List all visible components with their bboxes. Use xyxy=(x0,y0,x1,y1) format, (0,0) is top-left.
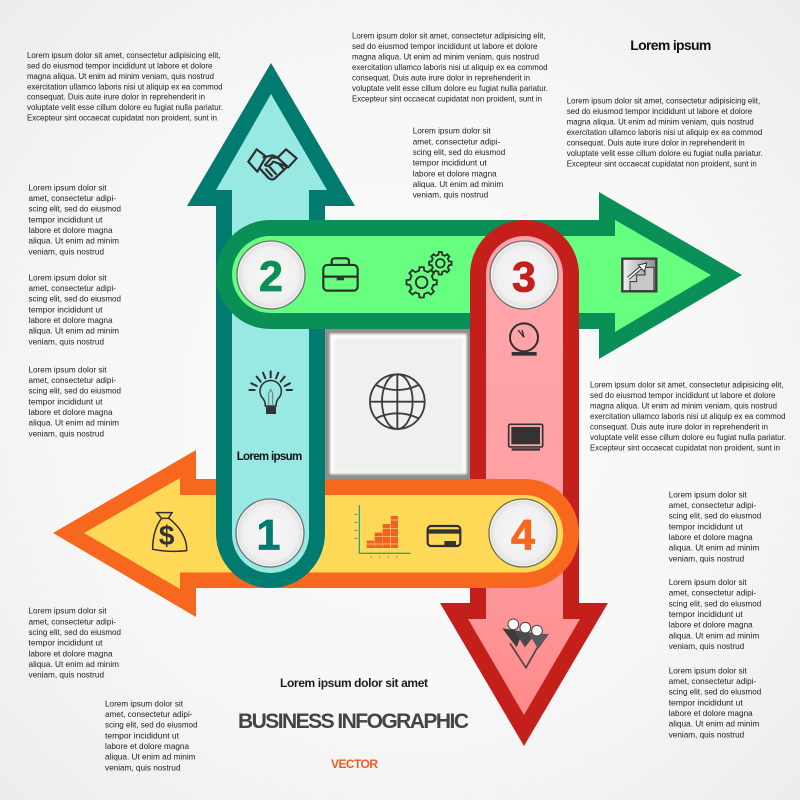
text block: right narrow 2: scing elit, sed do eiusmod xyxy=(669,598,761,608)
text block: top left: consequat. Duis aute irure dolor in reprehenderit in xyxy=(27,92,205,102)
text block: upper center narrow: tempor incididunt ut xyxy=(413,158,487,168)
text block: top center: magna aliqua. Ut enim ad minim veniam, quis nostrud xyxy=(352,52,539,62)
text block: right narrow 3: labore et dolore magna xyxy=(669,708,753,718)
text block: left narrow 2: scing elit, sed do eiusmod xyxy=(28,294,121,304)
text block: left narrow 1: amet, consectetur adipi- xyxy=(28,193,116,203)
number badge 4 xyxy=(489,499,557,567)
text block: top center: Excepteur sint occaecat cupidatat non proident, sunt in xyxy=(352,93,542,103)
text block: top left: sed do eiusmod tempor incididunt ut labore et dolore xyxy=(27,60,213,70)
text block: bottom left narrow xyxy=(105,698,198,772)
text block: left narrow 1: veniam, quis nostrud xyxy=(28,246,104,256)
text block: upper center narrow xyxy=(413,126,505,200)
text block: top right xyxy=(567,96,763,168)
text block: left narrow 3: amet, consectetur adipi- xyxy=(28,375,116,385)
text block: right narrow 2: aliqua. Ut enim ad minim xyxy=(669,630,759,640)
panel: arrow 4 orange left arrow xyxy=(53,450,579,617)
text block: right narrow 1: aliqua. Ut enim ad minim xyxy=(669,543,759,553)
text block: left narrow 1: labore et dolore magna xyxy=(28,225,113,235)
number badge 3 xyxy=(490,241,558,309)
heading: top right: Lorem ipsum xyxy=(630,37,711,53)
text block: top right: Lorem ipsum dolor sit amet, consectetur adipisicing elit, xyxy=(567,96,760,106)
text block: top left xyxy=(27,50,223,123)
text block: right narrow 2: labore et dolore magna xyxy=(669,620,753,630)
text block: right narrow 3: tempor incididunt ut xyxy=(669,697,743,707)
text block: top center: voluptate velit esse cillum dolore eu fugiat nulla pariatur. xyxy=(352,83,548,93)
text block: upper center narrow: Lorem ipsum dolor sit xyxy=(413,126,491,136)
text block: lower left narrow: tempor incididunt ut xyxy=(28,638,103,648)
text block: right narrow 1: veniam, quis nostrud xyxy=(669,553,744,563)
number badge 1: 1 xyxy=(257,512,280,560)
text block: right narrow 1: labore et dolore magna xyxy=(669,532,753,542)
text block: bottom left narrow: Lorem ipsum dolor sit xyxy=(105,698,184,708)
text block: right narrow 3: aliqua. Ut enim ad minim xyxy=(669,719,759,729)
text block: middle right xyxy=(590,380,786,452)
icon: globe xyxy=(370,374,425,429)
text block: top right: exercitation ullamco laboris nisi ut aliquip ex ea commod xyxy=(567,127,762,137)
text block: lower left narrow: amet, consectetur adipi- xyxy=(28,616,116,626)
text block: left narrow 2: Lorem ipsum dolor sit xyxy=(28,272,107,282)
text block: middle right: magna aliqua. Ut enim ad minim veniam, quis nostrud xyxy=(590,401,777,411)
text block: middle right: Lorem ipsum dolor sit amet, consectetur adipisicing elit, xyxy=(590,380,784,390)
text block: top left: Excepteur sint occaecat cupidatat non proident, sunt in xyxy=(27,113,217,123)
text block: middle right: consequat. Duis aute irure dolor in reprehenderit in xyxy=(590,421,768,431)
text block: top center: Lorem ipsum dolor sit amet, consectetur adipisicing elit, xyxy=(352,31,546,41)
text block: top right: magna aliqua. Ut enim ad minim veniam, quis nostrud xyxy=(567,117,754,127)
subtitle: Lorem ipsum dolor sit amet xyxy=(280,676,428,690)
text block: right narrow 3: veniam, quis nostrud xyxy=(669,729,744,739)
text block: bottom left narrow: scing elit, sed do eiusmod xyxy=(105,720,198,730)
panel: arrow 1 lower stem overlapping orange arrow xyxy=(216,430,325,588)
text block: middle right: Excepteur sint occaecat cupidatat non proident, sunt in xyxy=(590,442,780,452)
number badge 2 xyxy=(237,241,305,309)
number badge 2: 2 xyxy=(259,253,283,301)
text block: right narrow 1: tempor incididunt ut xyxy=(669,521,743,531)
panel: arrow 1 teal up arrow xyxy=(187,63,355,588)
text block: left narrow 3: scing elit, sed do eiusmod xyxy=(28,386,121,396)
text block: lower left narrow xyxy=(28,606,121,680)
panel: arrow 2 green right arrow xyxy=(216,192,742,359)
text block: right narrow 2: Lorem ipsum dolor sit xyxy=(669,577,747,587)
text block: bottom left narrow: amet, consectetur adipi- xyxy=(105,709,193,719)
text block: right narrow 1: Lorem ipsum dolor sit xyxy=(669,489,747,499)
text block: right narrow 3: scing elit, sed do eiusmod xyxy=(669,687,761,697)
text block: top right: sed do eiusmod tempor incididunt ut labore et dolore xyxy=(567,106,752,116)
icon: handshake xyxy=(248,149,297,179)
text block: top left: voluptate velit esse cillum dolore eu fugiat nulla pariatur. xyxy=(27,102,223,112)
text block: top left: magna aliqua. Ut enim ad minim veniam, quis nostrud xyxy=(27,71,214,81)
text block: top center: consequat. Duis aute irure dolor in reprehenderit in xyxy=(352,72,530,82)
tagline: VECTOR xyxy=(331,757,378,771)
icon: monitor xyxy=(509,424,543,451)
text block: upper center narrow: scing elit, sed do eiusmod xyxy=(413,147,505,157)
text block: left narrow 3 xyxy=(28,364,121,438)
icon: light bulb xyxy=(249,371,292,414)
text block: left narrow 2: tempor incididunt ut xyxy=(28,304,103,314)
bar chart xyxy=(355,505,411,558)
text block: left narrow 3: aliqua. Ut enim ad minim xyxy=(28,418,119,428)
text block: bottom left narrow: veniam, quis nostrud xyxy=(105,762,181,772)
text block: left narrow 2: amet, consectetur adipi- xyxy=(28,283,116,293)
text block: left narrow 2: veniam, quis nostrud xyxy=(28,336,104,346)
text block: right narrow 2 xyxy=(669,577,761,651)
text block: top left: Lorem ipsum dolor sit amet, consectetur adipisicing elit, xyxy=(27,50,220,60)
text block: bottom left narrow: labore et dolore magna xyxy=(105,741,189,751)
text block: middle right: sed do eiusmod tempor incididunt ut labore et dolore xyxy=(590,390,776,400)
text block: left narrow 2 xyxy=(28,272,121,346)
text block: upper center narrow: veniam, quis nostrud xyxy=(413,190,488,200)
text block: upper center narrow: aliqua. Ut enim ad minim xyxy=(413,179,503,189)
text block: right narrow 2: amet, consectetur adipi- xyxy=(669,588,756,598)
text block: right narrow 2: tempor incididunt ut xyxy=(669,609,743,619)
text block: lower left narrow: veniam, quis nostrud xyxy=(28,670,104,680)
text block: top left: exercitation ullamco laboris nisi ut aliquip ex ea commod xyxy=(27,81,223,91)
text block: left narrow 2: aliqua. Ut enim ad minim xyxy=(28,326,119,336)
text block: top right: Excepteur sint occaecat cupidatat non proident, sunt in xyxy=(567,158,757,168)
number badge 1 xyxy=(236,499,304,567)
text block: top center: exercitation ullamco laboris nisi ut aliquip ex ea commod xyxy=(352,62,548,72)
text block: left narrow 1: scing elit, sed do eiusmod xyxy=(28,204,121,214)
text block: right narrow 2: veniam, quis nostrud xyxy=(669,641,744,651)
text block: top center xyxy=(352,31,548,103)
text block: right narrow 1: amet, consectetur adipi- xyxy=(669,500,756,510)
text block: left narrow 1: aliqua. Ut enim ad minim xyxy=(28,236,119,246)
text block: bottom left narrow: tempor incididunt ut xyxy=(105,730,180,740)
text block: bottom left narrow: aliqua. Ut enim ad minim xyxy=(105,752,196,762)
icon: team of three people xyxy=(502,619,549,668)
text block: lower left narrow: labore et dolore magna xyxy=(28,648,113,658)
text block: left narrow 3: Lorem ipsum dolor sit xyxy=(28,364,107,374)
text block: top right: consequat. Duis aute irure dolor in reprehenderit in xyxy=(567,137,745,147)
text block: left narrow 1: Lorem ipsum dolor sit xyxy=(28,182,107,192)
number badge 4: 4 xyxy=(511,512,535,560)
text block: upper center narrow: labore et dolore magna xyxy=(413,168,497,178)
text block: left narrow 1: tempor incididunt ut xyxy=(28,214,103,224)
text block: left narrow 1 xyxy=(28,182,121,256)
icon: briefcase xyxy=(323,258,358,291)
text block: left narrow 2: labore et dolore magna xyxy=(28,315,113,325)
text block: top center: sed do eiusmod tempor incididunt ut labore et dolore xyxy=(352,41,538,51)
icon: desk clock xyxy=(510,323,538,356)
icon: money bag xyxy=(153,513,187,551)
text block: left narrow 3: tempor incididunt ut xyxy=(28,396,103,406)
number badge 3: 3 xyxy=(512,254,536,302)
icon: money bag: $ xyxy=(159,520,175,551)
icon: gears xyxy=(406,252,452,297)
text block: upper center narrow: amet, consectetur adipi- xyxy=(413,136,500,146)
panel: arrow 3 red down arrow xyxy=(440,220,608,746)
text block: lower left narrow: Lorem ipsum dolor sit xyxy=(28,606,107,616)
text block: middle right: voluptate velit esse cillum dolore eu fugiat nulla pariatur. xyxy=(590,432,786,442)
label on stem: Lorem ipsum xyxy=(237,451,302,463)
text block: left narrow 3: veniam, quis nostrud xyxy=(28,428,104,438)
center panel: globe square xyxy=(323,327,472,481)
text block: right narrow 1: scing elit, sed do eiusmod xyxy=(669,511,761,521)
text block: lower left narrow: aliqua. Ut enim ad minim xyxy=(28,659,119,669)
text block: lower left narrow: scing elit, sed do eiusmod xyxy=(28,627,121,637)
title: BUSINESS INFOGRAPHIC xyxy=(238,710,469,733)
text block: right narrow 1 xyxy=(669,489,761,563)
text block: top right: voluptate velit esse cillum dolore eu fugiat nulla pariatur. xyxy=(567,148,763,158)
icon: credit card xyxy=(428,526,460,546)
text block: right narrow 3: amet, consectetur adipi- xyxy=(669,676,756,686)
text block: left narrow 3: labore et dolore magna xyxy=(28,407,113,417)
text block: right narrow 3: Lorem ipsum dolor sit xyxy=(669,665,747,675)
icon: stairs with arrow xyxy=(622,259,656,291)
text block: right narrow 3 xyxy=(669,665,761,739)
